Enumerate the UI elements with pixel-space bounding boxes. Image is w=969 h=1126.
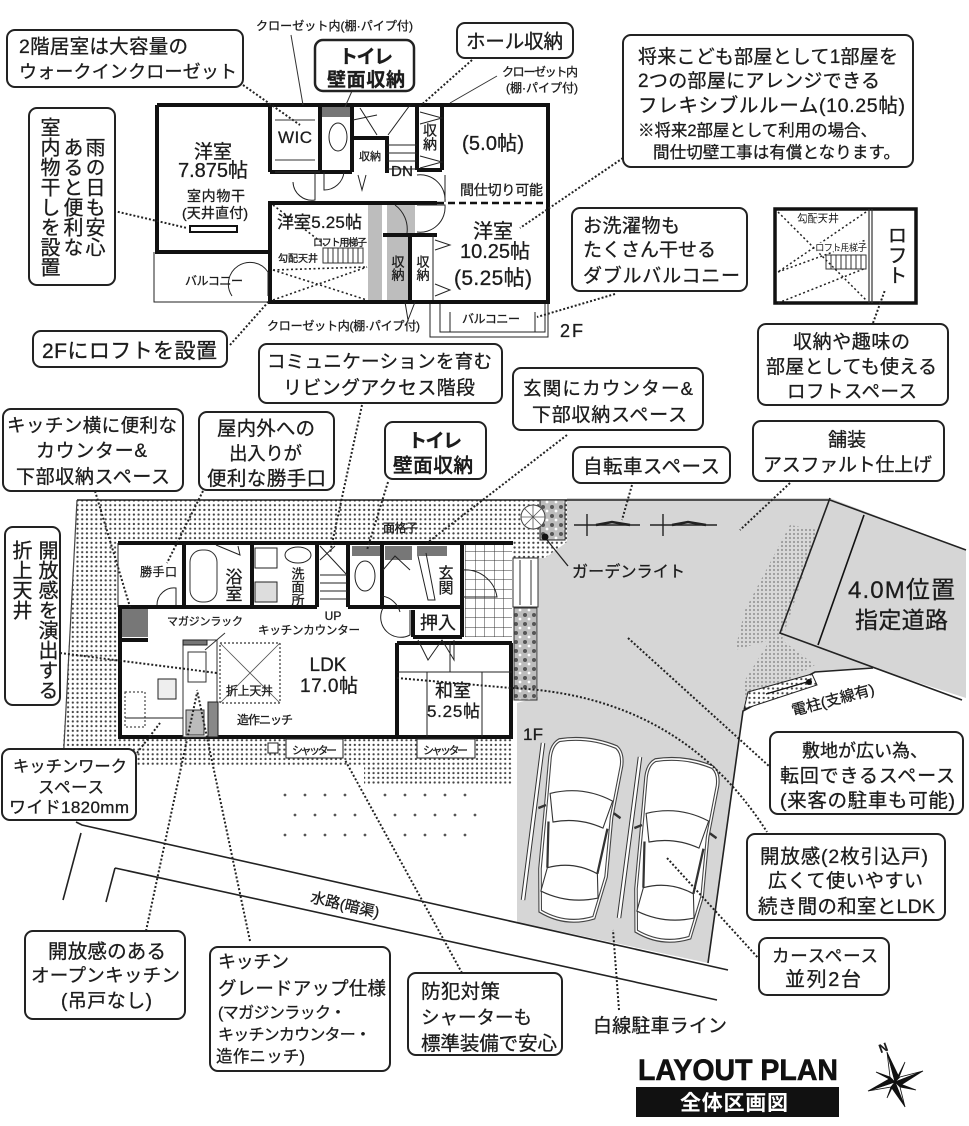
callout: loft space xyxy=(758,324,948,405)
utility pole arrow xyxy=(766,679,812,694)
indoor clothes drying rail xyxy=(190,226,237,232)
callout: drying room vertical: あると便利な xyxy=(60,137,83,257)
interior fixtures xyxy=(228,105,450,320)
room labels first floor: 造作ニッチ xyxy=(237,713,293,727)
room labels first floor: 勝手口 xyxy=(140,564,177,579)
callout: kitchen upgrade xyxy=(210,947,390,1071)
room labels second floor: バルコニー xyxy=(462,312,520,326)
main points white halves xyxy=(868,1052,923,1107)
parking white lines xyxy=(523,743,640,918)
callout: open kitchen xyxy=(25,931,185,1019)
room labels second floor: (5.25帖) xyxy=(454,267,532,290)
room labels first floor: 5.25帖 xyxy=(427,702,480,721)
callout: flexible room: 間仕切壁工事は有償となります。 xyxy=(653,143,900,162)
callout: toilet storage 1F xyxy=(385,422,486,479)
callout: entrance counter: 下部収納スペース xyxy=(532,404,687,426)
secondary points xyxy=(876,1062,916,1098)
callout: paving xyxy=(753,421,944,481)
room labels first floor: シャッター xyxy=(423,744,468,757)
callout: kitchen upgrade: (マガジンラック・ xyxy=(218,1004,346,1022)
callout: WIC: ウォークインクローゼット xyxy=(19,62,237,82)
callout: flexible room xyxy=(623,35,913,167)
callout: back door xyxy=(199,412,334,490)
callout: WIC xyxy=(7,30,243,87)
callout: flexible room: 2つの部屋にアレンジできる xyxy=(638,70,880,92)
room labels second floor xyxy=(178,18,583,341)
balconies xyxy=(154,252,548,337)
toilet wall storage xyxy=(352,546,381,556)
asphalt paved area and road xyxy=(517,498,966,963)
callout: loft space: 部屋としても使える xyxy=(766,356,937,378)
callout: car space: 並列2台 xyxy=(785,968,861,991)
subtitle text: 全体区画図 xyxy=(680,1092,788,1115)
main points black halves xyxy=(868,1052,923,1107)
room labels second floor: クローゼット内 xyxy=(502,65,578,79)
site labels: ガーデンライト xyxy=(572,562,685,581)
callout: kitchen upgrade: 造作ニッチ) xyxy=(216,1047,305,1066)
structural walls xyxy=(118,543,513,737)
floor plan: loft xyxy=(775,209,916,303)
room labels second floor: 収納 xyxy=(390,255,404,281)
callout: kitchen work space: ワイド1820mm xyxy=(9,798,129,817)
subtitle bar xyxy=(636,1087,839,1117)
callout: back door: 屋内外への xyxy=(217,418,315,440)
road outlines xyxy=(77,498,966,963)
callout: turning space xyxy=(770,732,963,814)
room labels second floor: 7.875帖 xyxy=(178,159,248,182)
left boundary xyxy=(63,500,77,765)
callout: toilet storage 1F: 壁面収納 xyxy=(393,455,473,477)
dishwasher and fridge space xyxy=(125,679,183,727)
sloped ceiling dotted lines xyxy=(273,205,367,300)
callout: turning space: 敷地が広い為、 xyxy=(802,741,928,761)
site labels: 4.0M位置 xyxy=(848,577,955,604)
vaulted ceiling dotted area xyxy=(220,643,280,703)
callout: vaulted ceiling vertical xyxy=(5,527,60,705)
movable partition xyxy=(437,202,548,204)
callout: kitchen work space: キッチンワーク xyxy=(13,758,127,776)
room labels second floor: 勾配天井 xyxy=(278,252,318,265)
walls xyxy=(157,105,548,302)
floor plan: second floor xyxy=(154,18,583,341)
callout: car space: カースペース xyxy=(772,946,878,966)
callout: open kitchen: 開放感のある xyxy=(48,941,166,963)
room labels second floor: 収納 xyxy=(422,123,438,151)
callout: kitchen counter xyxy=(3,409,183,491)
site labels: 水路(暗渠) xyxy=(309,889,381,922)
magazine rack storage xyxy=(122,608,148,637)
callout: open kitchen: (吊戸なし) xyxy=(61,991,152,1012)
callout: double balcony: お洗濯物も xyxy=(583,215,680,237)
room labels second floor: クローゼット内(棚·パイプ付) xyxy=(267,318,420,333)
site labels: 指定道路 xyxy=(855,607,948,633)
flower bed xyxy=(514,608,537,700)
room labels first floor: 面格子 xyxy=(383,520,418,535)
callout: kitchen work space: スペース xyxy=(38,779,104,797)
kitchen counter xyxy=(183,640,218,737)
callout: double balcony: ダブルバルコニー xyxy=(583,264,740,287)
room labels first floor: マガジンラック xyxy=(167,615,243,628)
room labels first floor: 浴室 xyxy=(222,568,242,602)
callout: flexible room: ※将来2部屋として利用の場合、 xyxy=(638,121,877,140)
icon: compass rose: N xyxy=(877,1040,890,1056)
room labels second floor: (5.0帖) xyxy=(462,132,524,155)
loft ladder hatch xyxy=(323,248,363,263)
site labels: 1F xyxy=(523,725,543,744)
callout: entrance counter xyxy=(513,368,703,430)
callout: entrance counter: 玄関にカウンター& xyxy=(523,378,694,399)
room labels first floor: 玄関 xyxy=(436,565,454,595)
callout: loft 2F xyxy=(33,331,227,367)
waterway lines xyxy=(63,822,728,1000)
callout: paving: アスファルト仕上げ xyxy=(763,454,932,476)
dotted garden area xyxy=(62,500,567,785)
callout: flexible room: フレキシブルルーム(10.25帖) xyxy=(638,94,905,117)
gray storage strips xyxy=(368,205,415,300)
room labels second floor: 洋室 xyxy=(194,141,232,163)
bathroom fixtures xyxy=(190,545,375,602)
callout: double balcony xyxy=(572,208,747,291)
room labels second floor: 収納 xyxy=(359,149,381,163)
room labels first floor: LDK xyxy=(310,655,347,676)
dithered road edge xyxy=(735,525,818,705)
callout: living access stairs xyxy=(259,344,502,403)
callout: loft space: 収納や趣味の xyxy=(793,331,910,353)
callout: kitchen upgrade: グレードアップ仕様 xyxy=(218,978,386,999)
callout: japanese room: 広くて使いやすい xyxy=(768,870,923,892)
room labels first floor: 押入 xyxy=(420,613,456,633)
callout: hall storage xyxy=(457,23,573,58)
title: LAYOUT PLAN: LAYOUT PLAN xyxy=(638,1054,838,1087)
room labels second floor: (天井直付) xyxy=(182,205,248,221)
shutters xyxy=(268,739,475,758)
room labels first floor xyxy=(140,520,480,757)
callout: double balcony: たくさん干せる xyxy=(583,240,716,261)
icon: compass rose xyxy=(868,1040,923,1107)
room labels second floor: DN xyxy=(391,163,413,180)
callout: back door: 出入りが xyxy=(229,443,302,464)
site plan: first floor grounds xyxy=(62,498,966,1000)
room labels first floor: 17.0帖 xyxy=(300,675,358,697)
loft labels: ロフト用梯子 xyxy=(815,242,867,254)
callout: living access stairs: コミュニケーションを育む xyxy=(267,351,492,372)
room labels second floor: 洋室 xyxy=(473,220,513,243)
room labels second floor: 10.25帖 xyxy=(460,240,530,263)
callout: living access stairs: リビングアクセス階段 xyxy=(283,377,475,399)
callout: japanese room: 続き間の和室とLDK xyxy=(758,896,935,918)
callout: drying room vertical: 室内物干しを設置 xyxy=(37,117,60,277)
site labels xyxy=(309,562,955,1037)
callout: bicycle space xyxy=(573,447,730,483)
callout: vaulted ceiling vertical: 開放感を演出する xyxy=(35,540,58,700)
callout: vaulted ceiling vertical: 折上天井 xyxy=(9,540,32,620)
loft ladder xyxy=(826,255,866,269)
room labels first floor: 洗面所 xyxy=(290,567,304,606)
callout: kitchen counter: 下部収納スペース xyxy=(16,466,170,488)
room labels second floor: 洋室5.25帖 xyxy=(277,213,362,232)
room labels first floor: キッチンカウンター xyxy=(258,624,360,637)
porch steps xyxy=(513,558,538,607)
callout: toilet storage 1F: トイレ xyxy=(408,431,462,452)
room labels first floor: 折上天井 xyxy=(226,683,273,698)
callout: paving: 舗装 xyxy=(828,429,866,451)
callout: WIC: 2階居室は大容量の xyxy=(19,36,188,58)
callout: open kitchen: オープンキッチン xyxy=(31,965,180,986)
house footprint xyxy=(118,543,513,737)
car 2 xyxy=(621,755,726,945)
room labels second floor: バルコニー xyxy=(185,274,243,288)
entrance counter storage xyxy=(385,546,447,560)
callout: shutter security: 標準装備で安心 xyxy=(421,1033,557,1055)
callout: hall storage: ホール収納 xyxy=(466,31,563,53)
site labels: 白線駐車ライン xyxy=(593,1015,727,1037)
room labels first floor: 和室 xyxy=(435,681,471,701)
leader lines xyxy=(60,35,885,1010)
loft dotted ceiling lines xyxy=(778,212,866,303)
callout: toilet storage 2F: トイレ xyxy=(339,47,393,68)
callout: kitchen work space xyxy=(2,749,136,820)
callout: turning space: 転回できるスペース xyxy=(780,765,955,787)
room labels second floor: WIC xyxy=(278,128,312,147)
callout: loft 2F: 2Fにロフトを設置 xyxy=(42,340,217,363)
callout: japanese room xyxy=(747,834,945,920)
site labels: 電柱(支線有) xyxy=(790,681,876,720)
callout: flexible room: 将来こども部屋として1部屋を xyxy=(638,46,898,68)
sparse planting dots xyxy=(284,794,476,836)
callout: kitchen counter: キッチン横に便利な xyxy=(7,415,177,436)
room labels first floor: UP xyxy=(325,609,341,623)
callout: bicycle space: 自転車スペース xyxy=(583,456,720,478)
callout: shutter security: 防犯対策 xyxy=(421,981,500,1003)
room labels second floor: 2F xyxy=(560,321,583,341)
room labels second floor: ロフト用梯子 xyxy=(313,236,367,249)
room labels first floor: シャッター xyxy=(292,744,337,757)
icon: bicycles xyxy=(574,514,717,536)
callout: turning space: (来客の駐車も可能) xyxy=(780,790,955,812)
entrance tiled porch xyxy=(465,545,512,637)
car 1 xyxy=(525,735,630,925)
callout: toilet storage 2F xyxy=(315,40,414,91)
callout: car space xyxy=(759,938,889,995)
room labels second floor: クローゼット内(棚·パイプ付) xyxy=(256,18,413,33)
utility pole patch xyxy=(744,674,817,709)
callout: japanese room: 開放感(2枚引込戸) xyxy=(760,846,928,868)
callout: kitchen upgrade: キッチンカウンター・ xyxy=(218,1026,371,1044)
callout: drying room vertical: 雨の日も安心 xyxy=(82,137,105,257)
callout: toilet storage 2F: 壁面収納 xyxy=(327,69,405,91)
title: LAYOUT PLAN xyxy=(636,1054,839,1117)
loft labels xyxy=(797,211,906,285)
room labels second floor: (棚·パイプ付) xyxy=(506,80,578,95)
loft labels: 勾配天井 xyxy=(797,211,839,225)
callout: loft space: ロフトスペース xyxy=(787,381,917,402)
stairs xyxy=(320,546,347,599)
callout: shutter security: シャーターも xyxy=(421,1007,532,1028)
room labels second floor: 室内物干 xyxy=(187,188,245,204)
door swings xyxy=(157,553,512,737)
loft labels: ロフト xyxy=(884,225,906,285)
4m dimension arrow xyxy=(818,515,864,645)
floor plan: first floor xyxy=(118,520,955,1037)
icon: garden planter and light xyxy=(521,500,568,566)
callout: shutter security xyxy=(408,973,562,1055)
callout: kitchen upgrade: キッチン xyxy=(218,952,289,972)
callout: back door: 便利な勝手口 xyxy=(207,468,326,490)
room labels second floor: 収納 xyxy=(414,255,430,281)
room labels second floor: 間仕切り可能 xyxy=(460,182,543,198)
callout: drying room vertical xyxy=(29,108,115,285)
callout: kitchen counter: カウンター& xyxy=(36,440,147,462)
